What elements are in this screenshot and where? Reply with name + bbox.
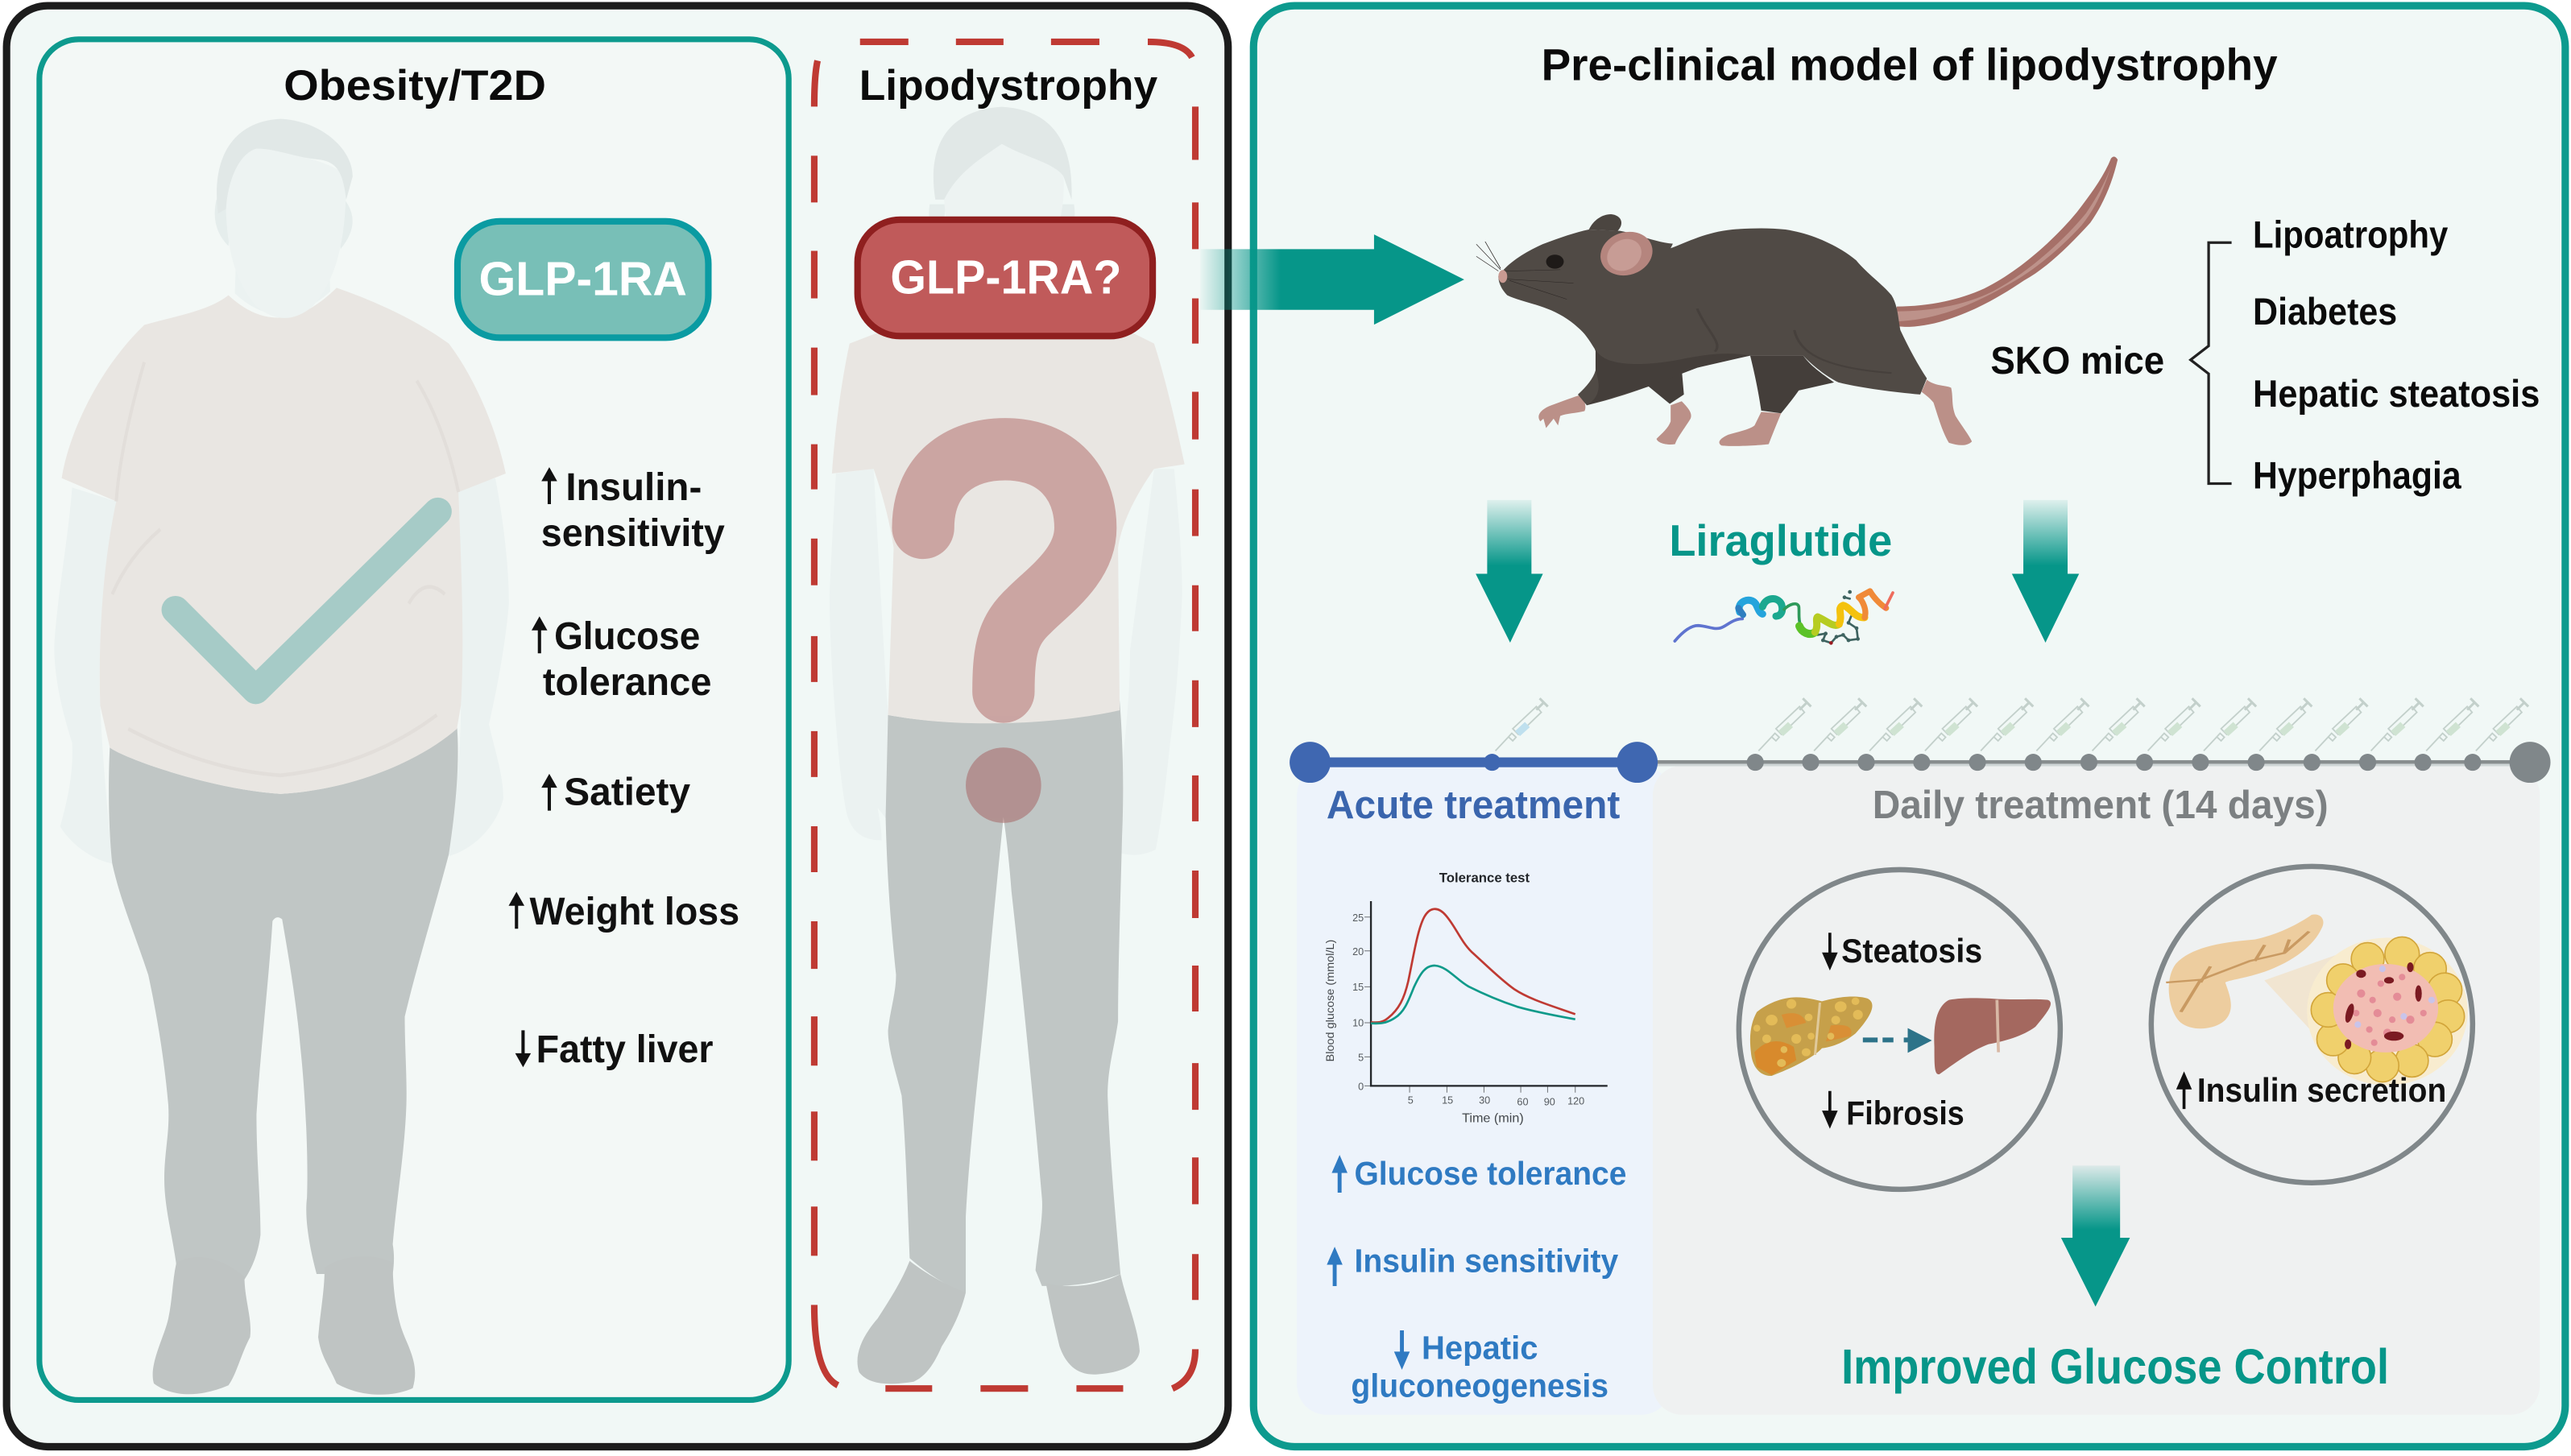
arrow: to improved glucose control [2061, 1165, 2130, 1306]
panel: clinical comparison [6, 6, 1228, 1446]
list: mouse phenotype: Lipoatrophy [2253, 213, 2448, 255]
heading: obesity: Obesity/T2D [284, 62, 546, 110]
heading: improved glucose control: Improved Glucose Control [1841, 1339, 2389, 1394]
list: acute effects: Glucose tolerance [1354, 1155, 1626, 1192]
chart: glucose tolerance test: 60 [1517, 1097, 1528, 1108]
badge: GLP-1RA: GLP-1RA [478, 252, 687, 305]
figure: obese man silhouette [54, 119, 509, 1395]
list: GLP-1RA benefits: Insulin- [565, 466, 702, 509]
list: acute effects: gluconeogenesis [1351, 1367, 1608, 1404]
arrow: left down [1476, 500, 1543, 643]
chart: glucose tolerance test: 20 [1352, 946, 1364, 958]
panel: acute treatment [1297, 766, 1671, 1415]
label: liraglutide: Liraglutide [1669, 515, 1892, 565]
panel: pancreas circle [2151, 867, 2473, 1183]
timeline: daily treatment [1656, 742, 2551, 783]
label: fibrosis: Fibrosis [1846, 1094, 1964, 1131]
panel: lipodystrophy dashed box [814, 42, 1195, 1388]
icon: liraglutide protein ribbon [1675, 590, 1893, 645]
chart: glucose tolerance test: Blood glucose (mmol/L) [1323, 940, 1336, 1061]
chart: glucose tolerance test: Time (min) [1462, 1111, 1524, 1125]
list: GLP-1RA benefits: tolerance [543, 661, 712, 704]
list: GLP-1RA benefits: sensitivity [541, 512, 725, 555]
badge: GLP-1RA [457, 221, 708, 337]
label: SKO mice: SKO mice [1990, 340, 2164, 383]
chart: glucose tolerance test: 15 [1442, 1095, 1453, 1106]
list: mouse phenotype: Diabetes [2253, 291, 2397, 333]
label: steatosis: Steatosis [1841, 932, 1982, 970]
chart: glucose tolerance test: 120 [1567, 1096, 1584, 1107]
list: GLP-1RA benefits: Fatty liver [536, 1028, 714, 1071]
icon: check mark [176, 511, 438, 690]
panel: daily treatment [1653, 766, 2540, 1415]
label: insulin secretion: Insulin secretion [2197, 1071, 2446, 1109]
bracket: SKO mice traits [2191, 242, 2232, 484]
heading: daily treatment: Daily treatment (14 days) [1873, 784, 2329, 827]
illustration: mouse [1476, 156, 2118, 446]
chart: glucose tolerance test: 5 [1358, 1053, 1364, 1064]
icon: question mark [923, 449, 1086, 823]
list: GLP-1RA benefits: Weight loss [530, 891, 739, 933]
arrow: clinical to pre-clinical [1200, 234, 1464, 325]
badge: GLP-1RA question: GLP-1RA? [890, 250, 1121, 304]
list: mouse phenotype: Hyperphagia [2253, 455, 2461, 497]
list: acute effects [1327, 1155, 1626, 1404]
timeline: acute treatment [1290, 742, 1658, 783]
list: acute effects: Insulin sensitivity [1354, 1243, 1619, 1280]
illustration: pancreas and islet [2166, 915, 2468, 1086]
chart: glucose tolerance test [1323, 871, 1608, 1125]
figure: lean man silhouette [830, 107, 1185, 1384]
list: mouse phenotype [2253, 213, 2540, 497]
list: GLP-1RA benefits [508, 466, 739, 1071]
badge: GLP-1RA question [858, 220, 1153, 336]
panel: liver circle [1739, 870, 2060, 1189]
chart: glucose tolerance test: 25 [1352, 912, 1364, 924]
list: mouse phenotype: Hepatic steatosis [2253, 373, 2540, 415]
chart: glucose tolerance test: 10 [1352, 1018, 1364, 1029]
heading: acute treatment: Acute treatment [1327, 784, 1620, 827]
panel: obesity/T2D box [39, 39, 789, 1400]
list: GLP-1RA benefits: Glucose [554, 615, 700, 658]
illustration: fatty liver to healthy liver [1750, 997, 2051, 1076]
chart: glucose tolerance test: 15 [1352, 982, 1364, 993]
chart: glucose tolerance test: 30 [1479, 1095, 1490, 1106]
list: acute effects: Hepatic [1422, 1330, 1538, 1367]
list: GLP-1RA benefits: Satiety [564, 771, 690, 814]
arrow: right down [2012, 500, 2079, 643]
chart: glucose tolerance test: Tolerance test [1439, 871, 1530, 886]
heading: lipodystrophy: Lipodystrophy [859, 62, 1158, 110]
icon: acute syringe [1496, 698, 1548, 751]
panel: pre-clinical model [1253, 6, 2565, 1446]
chart: glucose tolerance test: 90 [1544, 1097, 1555, 1108]
icons: daily syringes [1758, 698, 2528, 751]
chart: glucose tolerance test: 5 [1408, 1095, 1414, 1106]
heading: pre-clinical model: Pre-clinical model of lipodystrophy [1542, 39, 2278, 90]
chart: glucose tolerance test: 0 [1358, 1081, 1364, 1092]
